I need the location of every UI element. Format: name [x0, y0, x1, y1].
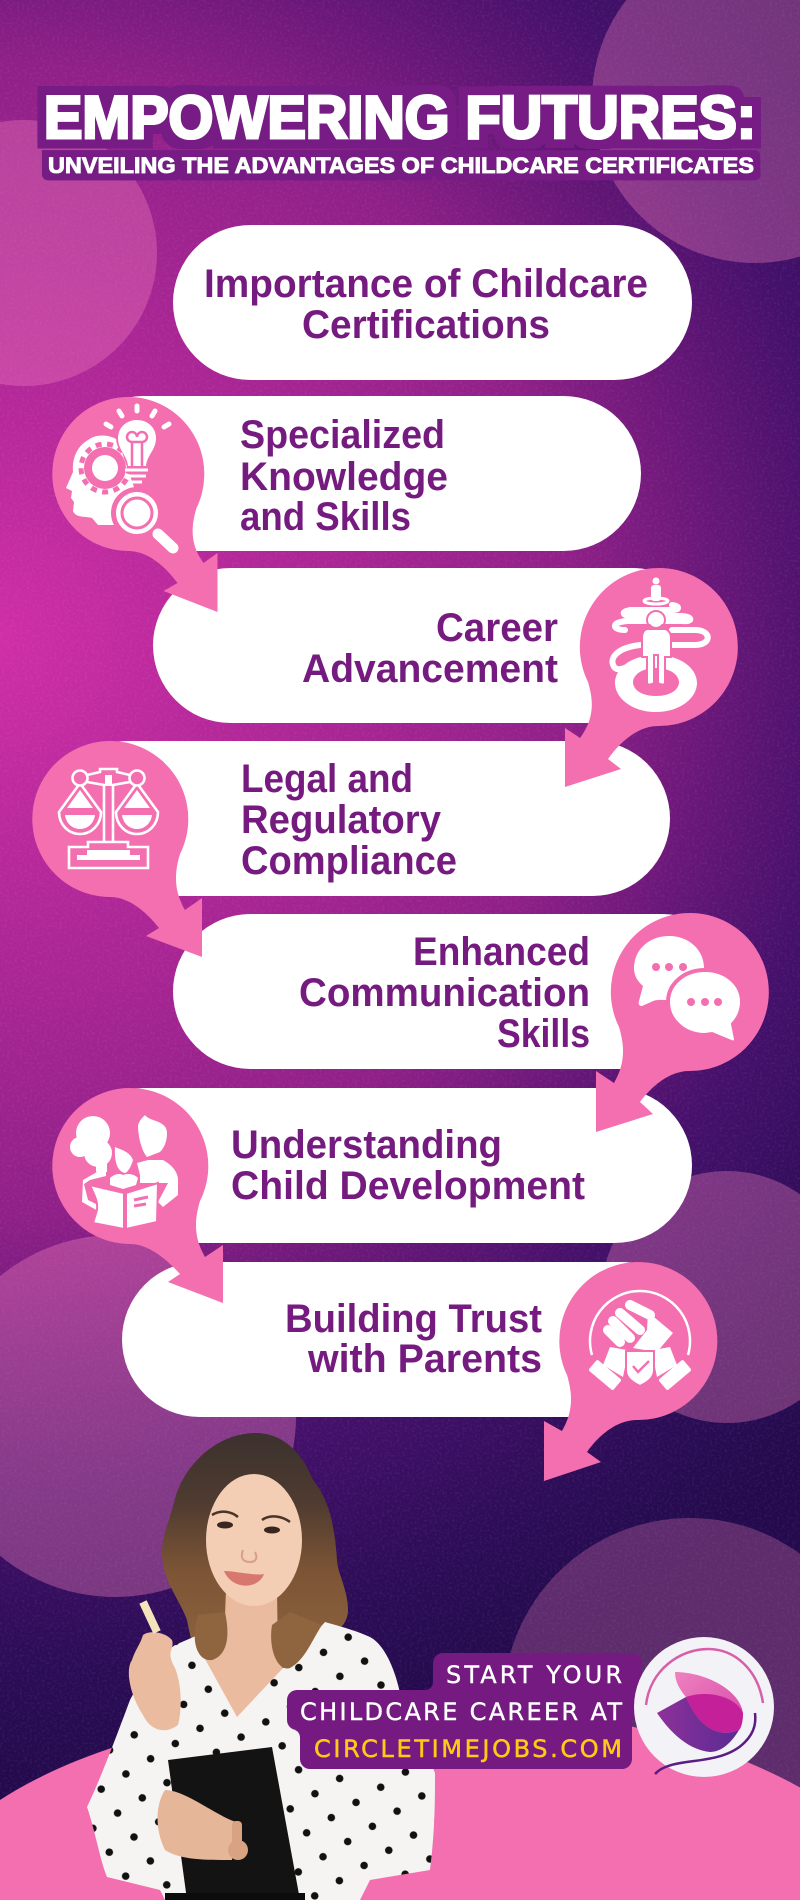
icon: handshake with shield — [588, 1291, 692, 1391]
icon: career path with people — [612, 578, 708, 712]
panel: legal and regulatory compliance: Regulatory — [241, 798, 442, 842]
panel: building trust with parents — [122, 1262, 700, 1417]
bubble arrow: child development — [52, 1088, 223, 1303]
panel: importance of childcare certifications: Certifications — [302, 303, 550, 347]
call to action: CHILDCARE CAREER AT — [300, 1698, 622, 1726]
subtitle: UNVEILING THE ADVANTAGES OF CHILDCARE CERTIFICATES — [48, 153, 754, 178]
woman with book and chalk — [87, 1433, 435, 1900]
panel: importance of childcare certifications: Importance of Childcare — [204, 262, 648, 306]
bubble arrow: communication — [596, 913, 769, 1132]
bubble arrow: legal compliance — [32, 741, 202, 957]
facial features — [212, 1512, 290, 1586]
panel: enhanced communication skills — [173, 914, 740, 1069]
panel: career advancement: Advancement — [302, 647, 558, 691]
icon: speech bubbles — [634, 936, 742, 1042]
skirt — [165, 1893, 305, 1900]
title block — [44, 84, 756, 178]
icon: head, gear, bulb and magnifier — [66, 406, 173, 548]
raised hand — [129, 1632, 181, 1730]
panel: career advancement — [153, 568, 710, 723]
neck and chest — [198, 1590, 290, 1722]
panel: building trust with parents: Building Trust — [285, 1297, 542, 1341]
panel: understanding child development: Child Development — [231, 1164, 585, 1208]
panel: specialized knowledge and skills — [66, 396, 641, 551]
title: EMPOWERING FUTURES: — [44, 84, 756, 151]
front hair — [190, 1442, 316, 1545]
panel: specialized knowledge and skills: Specialized — [240, 413, 445, 457]
icon: scales of justice — [59, 769, 158, 868]
panel: specialized knowledge and skills: and Skills — [240, 495, 411, 539]
call to action: CIRCLETIMEJOBS.COM — [314, 1735, 622, 1763]
panel: legal and regulatory compliance: Compliance — [241, 839, 457, 883]
panel: legal and regulatory compliance: Legal and — [241, 757, 413, 801]
logo — [634, 1637, 774, 1777]
panel: building trust with parents: with Parents — [307, 1337, 542, 1381]
call to action: START YOUR — [446, 1661, 622, 1689]
panel: understanding child development: Understanding — [231, 1123, 502, 1167]
panel: enhanced communication skills: Enhanced — [413, 930, 590, 974]
hand holding book — [158, 1790, 236, 1860]
face — [206, 1474, 302, 1606]
panel: enhanced communication skills: Skills — [497, 1012, 590, 1056]
bubble arrow: career advancement — [565, 568, 738, 787]
panel: career advancement: Career — [436, 606, 558, 650]
panel: understanding child development — [66, 1088, 692, 1243]
hair — [162, 1433, 348, 1668]
call to action — [287, 1653, 642, 1769]
watch — [228, 1821, 248, 1860]
pink hill — [0, 1703, 800, 1900]
panel: legal and regulatory compliance — [50, 741, 670, 896]
bubble arrow: specialized knowledge — [52, 397, 218, 612]
bubble arrow: building trust — [544, 1262, 717, 1481]
book — [168, 1747, 300, 1900]
icon: family reading a book — [70, 1115, 178, 1229]
panel: specialized knowledge and skills: Knowledge — [240, 455, 448, 499]
chalk — [143, 1602, 157, 1632]
panel: enhanced communication skills: Communication — [299, 971, 590, 1015]
polka dot blouse — [87, 1622, 435, 1900]
panel: importance of childcare certifications — [173, 225, 692, 380]
curls over blouse — [195, 1612, 322, 1668]
